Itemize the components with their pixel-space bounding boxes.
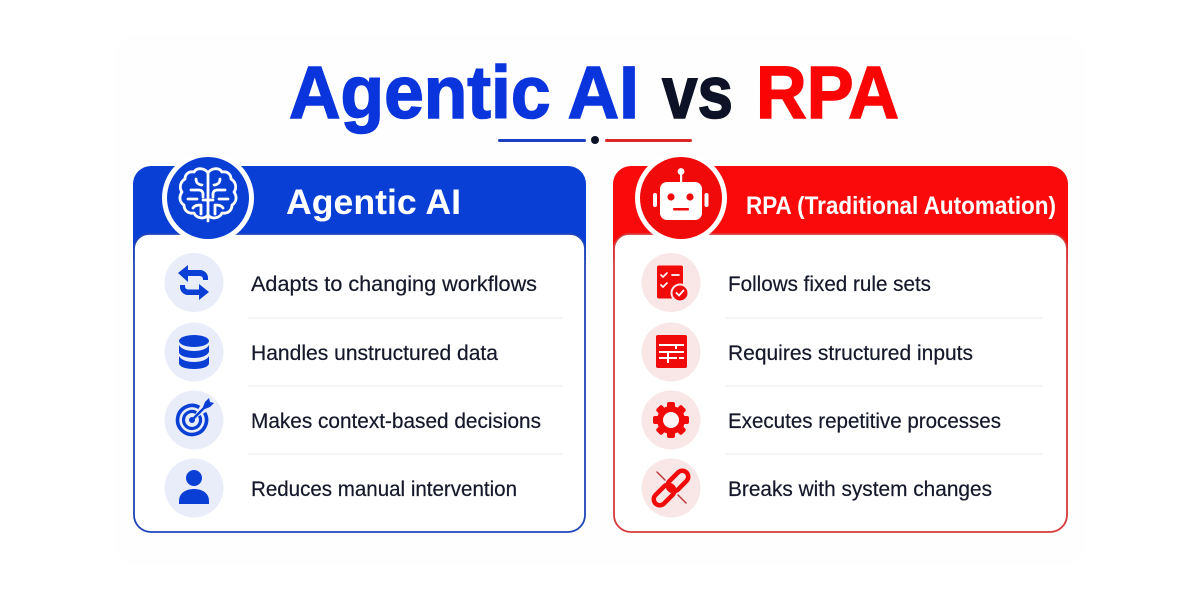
header badge: robot [635,152,727,244]
row 2: Handles unstructured data [251,342,498,365]
row 2 [164,322,498,382]
header badge: brain [162,152,254,244]
panel body: red [614,234,1067,532]
row 2 [642,322,973,382]
row 4 [164,458,517,518]
panel header: blue [133,166,586,260]
title: RPA [756,51,899,134]
row 3: Executes repetitive processes [728,410,1001,433]
panel: Agentic AI [133,152,586,532]
header title: RPA (Traditional Automation) [746,192,1056,220]
header title: Agentic AI [286,183,461,222]
row 3: Makes context-based decisions [251,410,541,433]
row 1: Follows fixed rule sets [728,273,931,296]
row 4: Reduces manual intervention [251,478,517,501]
title [289,51,899,134]
row 1 [642,253,931,312]
row 3 [164,390,541,450]
row 1 [164,253,537,312]
title: vs [662,51,733,134]
row 2: Requires structured inputs [728,342,973,365]
title underline divider [498,136,692,144]
panel body: blue [134,234,585,532]
panel header: red [613,166,1068,260]
row 4: Breaks with system changes [728,478,992,501]
title: Agentic AI [289,51,639,134]
row 3 [642,390,1001,450]
row 1: Adapts to changing workflows [251,273,537,296]
panel: RPA [613,152,1068,532]
row 4 [642,458,992,518]
